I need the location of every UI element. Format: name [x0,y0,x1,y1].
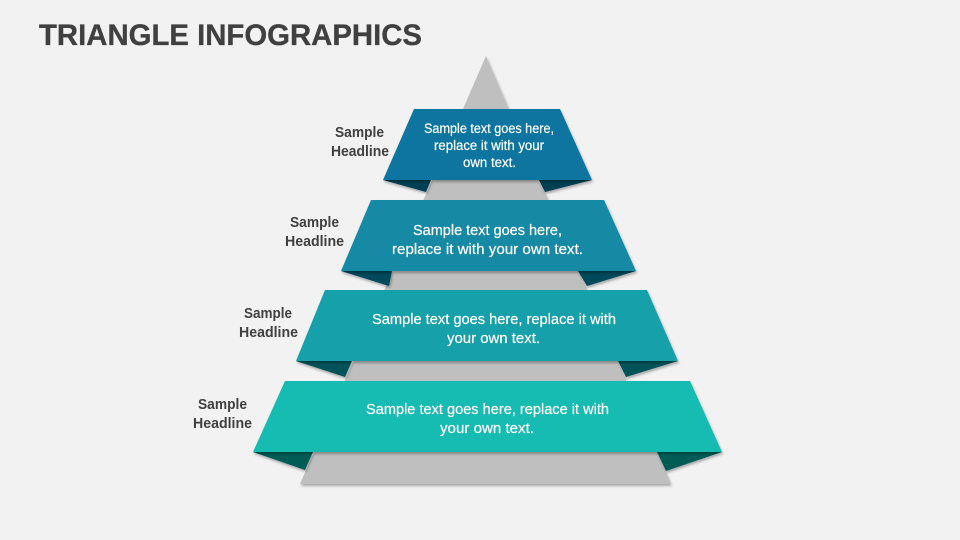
tier 4 body text [366,402,609,437]
tier 3 body text: Sample text goes here, replace it with [372,312,616,328]
tier 2 band [341,200,636,286]
tier 2 headline: Headline [285,234,344,250]
tier 4 right fold [657,452,722,471]
tier 1 headline: Headline [331,144,389,160]
tier 4 headline: Sample [198,397,247,413]
tier 1 body text: own text. [463,155,516,170]
tier 3 body text: your own text. [447,331,540,347]
tier 2 headline: Sample [290,215,339,231]
grey pyramid backdrop [300,56,671,484]
tier 1 left fold [383,180,431,192]
title: TRIANGLE INFOGRAPHICS [39,19,422,52]
tier 4 headline [193,397,252,432]
tier 2 body text: Sample text goes here, [413,223,562,239]
tier 3 right fold [618,361,678,377]
tier 1 body text: Sample text goes here, [424,121,554,136]
tier 4 headline: Headline [193,416,252,432]
tier 4 band [253,381,722,471]
tier 4 left fold [253,452,313,470]
tier 1 band [383,109,592,192]
tier 2 headline [285,215,344,250]
tier 2 body text: replace it with your own text. [392,242,583,258]
tier 1 headline: Sample [335,125,384,141]
tier 2 ribbon [341,200,636,271]
tier 3 headline: Headline [239,325,298,341]
tier 3 band [296,290,678,377]
tier 2 body text [392,223,583,258]
tier 3 body text [372,312,616,347]
tier 1 ribbon [383,109,592,180]
tier 2 right fold [578,271,636,286]
tier 3 ribbon [296,290,678,361]
tier 3 left fold [296,361,352,377]
tier 4 body text: Sample text goes here, replace it with [366,402,609,418]
tier 3 headline: Sample [244,306,292,322]
tier 4 body text: your own text. [440,421,534,437]
tier 1 right fold [539,180,592,192]
tier 1 headline [331,125,389,160]
tier 1 body text: replace it with your [434,138,544,153]
tier 3 headline [239,306,298,341]
tier 4 ribbon [253,381,722,452]
tier 1 body text [424,121,554,170]
tier 2 left fold [341,271,392,286]
